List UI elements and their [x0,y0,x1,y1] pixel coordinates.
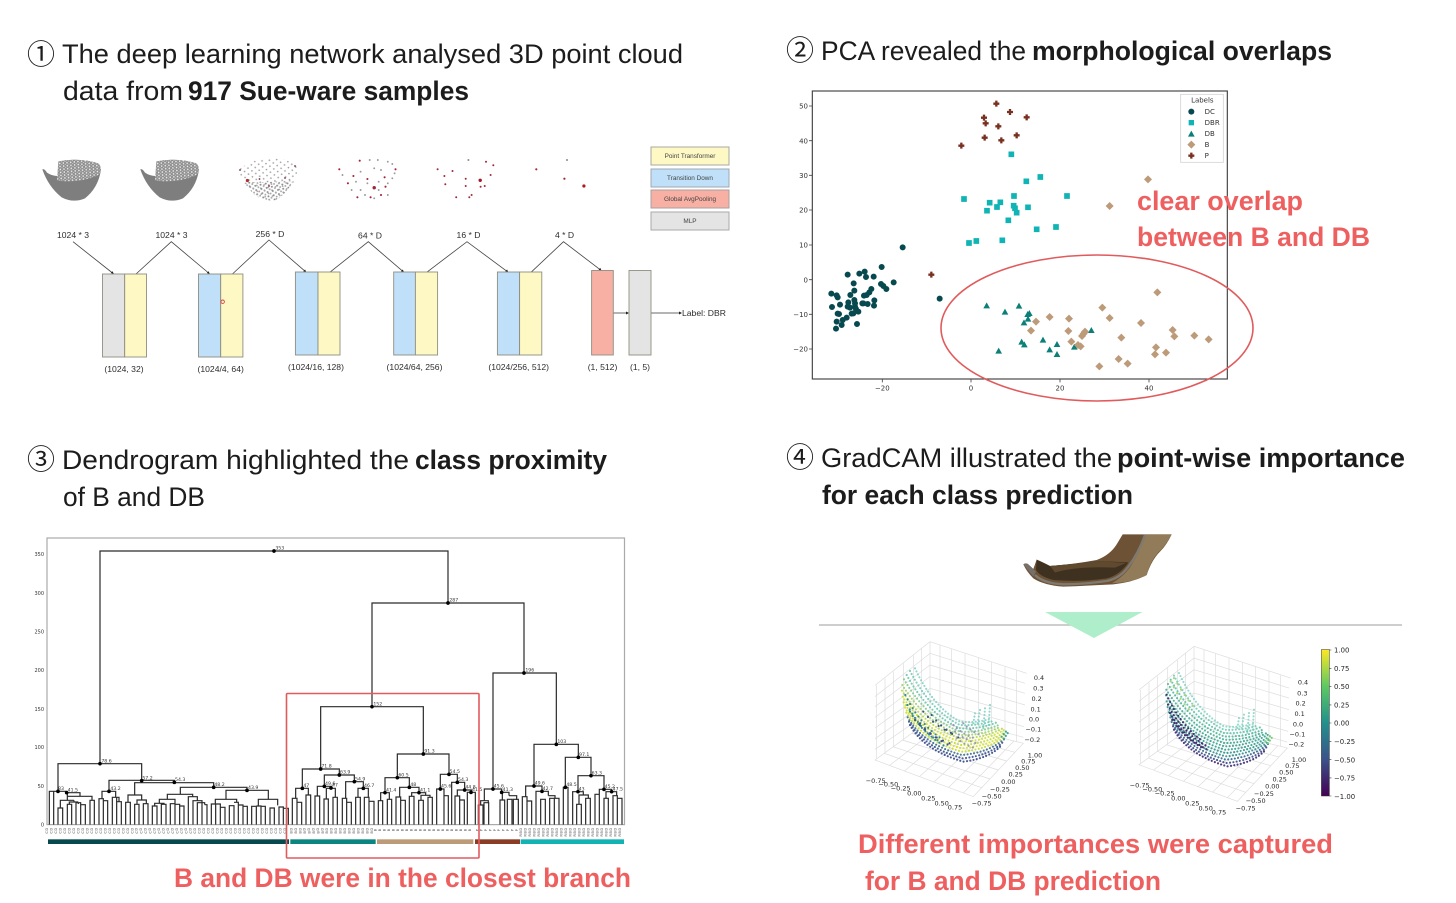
axis ticks and labels: −20 [875,384,890,392]
heading 3: Dendrogram highlighted the [62,445,409,475]
heading 3 [27,444,607,512]
heading 4: for each class prediction [822,480,1133,510]
callout: clear overlap: between B and DB [1137,222,1370,252]
node height labels: 48.2 [214,782,225,788]
scatter legend: B [1205,141,1210,149]
callout box: closest branch [286,694,479,858]
leaf labels: BBBBBBBBBBBBBBBBBBBBBBB [519,831,622,834]
axis labels: 0.25 [1272,775,1287,783]
node height labels [58,546,623,793]
points [902,668,1008,762]
y axis labels: 250 [34,630,44,636]
colour bar: 0.50 [1334,683,1349,691]
node height labels: 103 [557,739,566,745]
heading 2: morphological overlaps [1032,36,1332,66]
node height labels: 54.3 [175,777,185,783]
arrows between blocks [73,240,682,314]
colour bar [1321,646,1355,801]
node height labels: 41.1 [420,787,430,793]
colour bar: 0.75 [1334,665,1349,673]
colour bar: −0.50 [1334,756,1355,764]
axis ticks and labels: 40 [1145,384,1153,392]
size labels: 16 * D [457,230,480,240]
node height labels: 41.3 [503,787,513,793]
node height labels: 43.9 [248,785,258,791]
node height labels: 45.6 [494,784,504,790]
callout: clear overlap: clear overlap [1137,186,1303,216]
axis ticks and labels: 30 [799,172,808,180]
heading 1: The deep learning network analysed 3D point cloud [62,39,683,69]
heading 2: PCA revealed the [821,36,1026,66]
axis labels [866,674,1044,812]
axis labels: 0.75 [1285,762,1300,770]
size labels: 4 * D [555,230,574,240]
leaf labels: DDDDDDDDDDDDDDDDDDD [289,828,374,831]
callout ellipse: overlap region [941,255,1253,401]
divider line [819,624,1402,626]
colour bar: 0.25 [1334,701,1349,709]
axis labels: −0.50 [878,781,898,789]
point cloud: stage 3 [339,160,396,198]
legend: Point Transformer [665,153,716,160]
axes frame [812,91,1227,379]
axis labels: −0.1 [1025,726,1041,734]
y axis labels: 150 [34,707,44,713]
node height labels: 49.6 [325,781,335,787]
heading 4: GradCAM illustrated the [821,443,1112,473]
shape captions: (1, 5) [630,362,650,372]
axis labels: 0.2 [1296,700,1306,708]
y axis labels: 300 [34,591,44,597]
axis ticks and labels: 40 [799,137,808,145]
leaf labels: DDDDDDDDDDDDDDDDDDDDDDD [519,828,622,831]
scatter legend: DC [1205,108,1215,116]
callout: different importances: Different importances were captured [858,829,1333,859]
leaf labels: CCCCCCCCCCCCCCCCCCCCCCCCCCCCCCCCCCCCCCCCCCCCCCCCCCCCCC [45,831,287,834]
axis labels: 0.3 [1297,689,1307,697]
node height labels: 196 [525,668,534,674]
y axis labels: 50 [38,784,44,790]
axis labels: 0.75 [1212,808,1226,816]
axis ticks and labels: 0 [969,384,973,392]
axis labels: −0.1 [1289,730,1305,738]
legend: MLP [683,218,697,225]
axis labels: 0.00 [1001,778,1016,786]
axis ticks and labels: −20 [793,346,808,354]
axis labels: 0.4 [1298,679,1308,687]
axis labels: 0.75 [948,804,962,812]
axis labels: −0.75 [972,800,992,808]
node height labels: 78.6 [101,758,112,764]
axis labels: 0.4 [1034,674,1044,682]
node height labels: 43.2 [110,786,121,792]
heading 2: ② [786,35,814,66]
node height labels: 83 [58,786,64,792]
size labels: 256 * D [256,229,284,239]
colour bar: 0.00 [1334,720,1349,728]
scatter legend [1181,94,1223,162]
colour bar: 1.00 [1334,646,1349,654]
node height labels: 48.5 [566,782,577,788]
node height labels: 97.1 [579,752,589,758]
colour bar: −1.00 [1334,793,1355,801]
scatter legend: DB [1205,130,1215,138]
node height labels: 63.9 [340,770,350,776]
node height labels: 54.3 [458,777,468,783]
node height labels: 42.7 [543,786,553,792]
axis labels: −0.25 [990,785,1010,793]
y axis labels: 350 [34,552,44,558]
point cloud: stage 5 [536,160,584,186]
heading 1: 917 Sue-ware samples [188,76,469,106]
axis labels: 0.25 [921,795,936,803]
frame [47,538,624,825]
axis ticks and labels: 20 [799,207,808,215]
node height labels: 71.8 [321,764,332,770]
point cloud stages [42,158,584,201]
axis labels [1130,679,1308,816]
shape captions: (1024/64, 256) [387,362,443,372]
node height labels: 91.3 [424,749,435,755]
axis labels: −0.50 [1142,785,1162,793]
node height labels: 41.4 [386,787,396,793]
heading 3: of B and DB [63,482,205,512]
node height labels: 41.5 [68,787,78,793]
size labels: 1024 * 3 [155,230,188,240]
node height labels: 45.6 [441,784,451,790]
leaf labels: PPPPPPPPPP [475,828,519,831]
node height labels: 57.2 [142,775,153,781]
y axis labels: 100 [34,745,44,751]
point cloud: input [42,160,101,201]
callout: different importances [858,829,1333,896]
axis labels: 0.1 [1031,705,1041,713]
series: P [928,101,1030,278]
colour bar: −0.75 [1334,775,1355,783]
node height labels: 44.8 [465,785,476,791]
node height labels: 60.5 [398,772,409,778]
colour bar: −0.25 [1334,738,1355,746]
axis labels: 0.50 [1279,769,1294,777]
node height labels: 152 [373,701,382,707]
shape captions: (1, 512) [588,362,617,372]
size labels: 1024 * 3 [57,230,89,240]
node height labels: 43 [579,786,585,792]
leaf labels: RRRRRRRRRRRRRRRRRRRRRRR [519,834,622,837]
tree links [49,551,622,825]
axis labels: −0.50 [1246,797,1266,805]
scatter legend: Labels [1191,96,1214,104]
y axis labels: 200 [34,668,44,674]
axis labels: 0.3 [1033,685,1043,693]
tree nodes [58,551,612,793]
leaf labels [45,828,622,837]
axis labels: 0.50 [1015,764,1030,772]
axis labels: 0.50 [934,800,949,808]
callout: different importances: for B and DB prediction [865,866,1161,896]
node height labels: 54.9 [355,776,365,782]
legend [651,147,729,230]
axis labels: 1.00 [1292,756,1306,764]
series: DBR [964,154,1067,243]
series: B [1027,175,1213,370]
axis labels: 1.00 [1028,751,1042,759]
axis labels: −0.75 [1130,782,1150,790]
node height labels: 49.6 [535,781,545,787]
axis labels: 0.0 [1293,720,1303,728]
node height labels: 63.3 [592,770,602,776]
arrow: down triangle [1045,612,1142,638]
node height labels: 54.5 [450,769,460,775]
shape captions: (1024/16, 128) [288,362,344,372]
axis labels: −0.25 [1254,790,1274,798]
legend: Global AvgPooling [664,196,716,203]
axis labels: 0.2 [1032,695,1042,703]
shape captions: (1024/256, 512) [488,362,549,372]
point cloud: stage 1 [140,160,199,201]
axis labels: 0.0 [1029,716,1039,724]
heading 1: ① [27,39,55,70]
node height labels: 46.7 [364,783,374,789]
shape captions [104,362,650,374]
leaf labels: BBBBBBBBBBBBBBBBBBB [289,831,374,834]
axis ticks and labels: 10 [799,242,808,250]
output label: Label: DBR [682,308,726,318]
heading 4: ④ [786,442,814,473]
heading 2 [786,35,1332,66]
panel: network architecture [42,147,729,374]
leaf labels: DDDDDDDDDDDDDDDDDDDDDDDDDDDDDDDDDDDDDDDDDDDDDDDDDDDDDD [45,828,287,831]
class colour bar [48,839,624,844]
scatter legend: P [1205,152,1209,160]
y axis labels: 0 [41,822,44,828]
axis labels: 0.00 [907,790,922,798]
callout: closest branch text: B and DB were in the closest branch [174,863,631,893]
leaf labels: BBBBBBBBBBBBBBBBBBBBBB [374,828,472,831]
axis labels: −0.2 [1288,741,1304,749]
point cloud: stage 4 [438,160,493,197]
heading 3: class proximity [415,445,607,475]
heading 1: data from [63,76,183,106]
axis ticks and labels: 50 [799,103,808,111]
heading 3: ③ [27,444,55,475]
heading 4 [786,442,1405,510]
encoder blocks [102,270,651,357]
chart: GradCAM 3D point cloud DB [1130,646,1308,816]
axis labels: −0.25 [891,785,911,793]
axis labels: 0.25 [1185,799,1200,807]
illustration: Sue-ware vessel [1023,534,1172,587]
node height labels: 48 [410,782,416,788]
chart: GradCAM 3D point cloud B [866,642,1044,812]
series: DB [983,302,1095,357]
series: DC [831,247,940,329]
axis labels: 0.25 [1008,771,1023,779]
points [1166,673,1272,766]
chart: PCA scatter plot [793,91,1227,392]
axis labels: −0.50 [982,792,1002,800]
point cloud: stage 2 [238,158,298,200]
size labels: 64 * D [358,230,382,240]
heading 1 [27,39,683,106]
callout: clear overlap [1137,186,1370,252]
node height labels: 47 [332,783,338,789]
heading 4: point-wise importance [1117,443,1405,473]
axis labels: 0.75 [1021,757,1036,765]
node height labels: 353 [275,546,284,552]
y axis labels [34,552,44,828]
axis ticks and labels: 20 [1056,384,1064,392]
shape captions: (1024/4, 64) [198,364,244,374]
axis labels: 0.00 [1265,783,1280,791]
axis labels: 0.50 [1198,804,1213,812]
axis ticks and labels [793,103,1153,392]
axis labels: −0.2 [1024,736,1040,744]
axis ticks and labels: 0 [804,276,808,284]
scatter legend: DBR [1205,119,1220,127]
axis labels: 0.1 [1295,710,1305,718]
axis ticks and labels: −10 [793,311,808,319]
node height labels: 287 [449,598,458,604]
shape captions: (1024, 32) [104,364,144,374]
axis labels: 0.00 [1171,794,1186,802]
node height labels: 45.2 [605,784,615,790]
size labels [57,229,574,240]
node height labels: 41.5 [472,787,482,793]
axis labels: −0.75 [866,777,886,785]
axis labels: −0.25 [1155,789,1175,797]
axis labels: −0.75 [1236,804,1256,812]
node height labels: 47 [303,783,309,789]
legend: Transition Down [667,175,713,182]
node height labels: 47.5 [613,786,623,792]
chart: dendrogram [34,538,624,844]
